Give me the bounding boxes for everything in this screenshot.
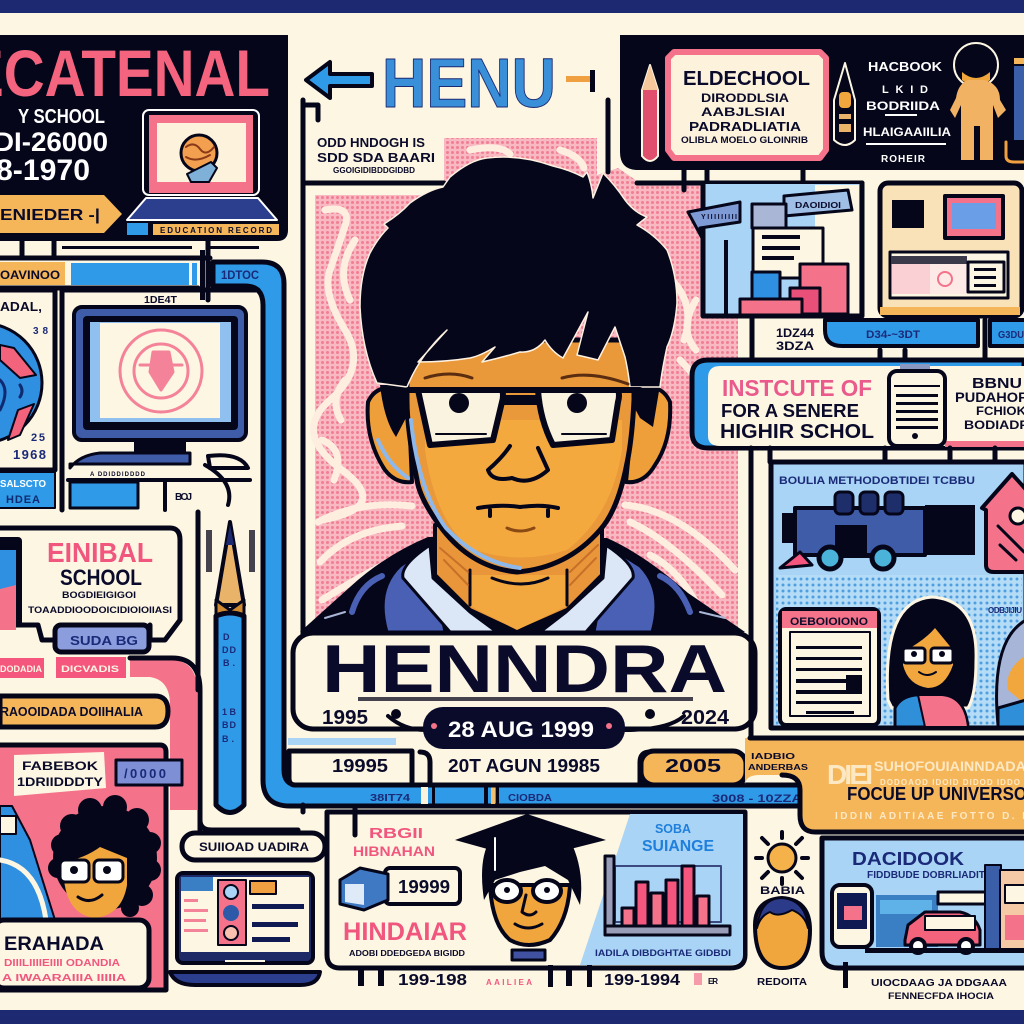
card: eldechool: OLIBLA MOELO GLOINRIB: [681, 135, 809, 145]
panel: monitor: A DDIDDIDDDD: [90, 472, 146, 478]
text: school dates: [0, 106, 108, 187]
footer years: AAILIEA: [486, 978, 532, 987]
panel: pencil column: [198, 512, 298, 830]
text: soba suiange: [642, 821, 714, 855]
text: rbgii: [353, 825, 435, 859]
icon: sun: BABIA: [760, 885, 805, 897]
label: blue box: [0, 472, 55, 508]
footer years: 199-1994: [604, 972, 680, 989]
pink pipe: [130, 660, 197, 810]
panel: right large blue: [751, 448, 1024, 740]
label: 0000: [116, 760, 182, 785]
label: suda bg: SUDA BG: [70, 633, 138, 648]
caption box: DIIILIIIIEIIII ODANDIA: [4, 958, 120, 969]
label: blue box: HDEA: [6, 494, 40, 506]
cell 2005: 2005: [665, 756, 721, 776]
year bars: [752, 318, 1024, 358]
cell 19995: [289, 751, 412, 785]
footer years: 199-198: [398, 972, 467, 989]
document: [752, 204, 823, 278]
fine print: BOGDIEIGIGOI: [62, 590, 136, 600]
text: hindaiar: [343, 918, 467, 958]
portrait caption: GGOIGIDIBDDGIDBD: [333, 166, 415, 175]
footer years: [358, 965, 718, 989]
icon: laptop: [127, 110, 279, 235]
panel: einibal school: [0, 528, 180, 640]
panel: top-left title: [0, 35, 288, 241]
banner right: DAOIDIOI: [795, 201, 841, 210]
label: pink tags: DICVADIS: [61, 664, 119, 674]
icon: phone: [0, 537, 22, 630]
caption box: ERAHADA: [4, 934, 104, 955]
card: eldechool: PADRADLIATIA: [689, 119, 802, 134]
text: bbnu: BODIADF: [964, 418, 1024, 432]
text: school dates: Y SCHOOL: [18, 106, 105, 128]
face: [407, 340, 634, 572]
icon: train: [780, 492, 975, 569]
glasses: [408, 390, 640, 445]
blue connector: 3008 - 10ZZA: [712, 793, 802, 805]
row under monitor: BOJ: [175, 492, 192, 503]
bar chart: [605, 856, 730, 935]
portrait caption: ODD HNDOGH IS: [317, 135, 425, 150]
card: eldechool: DIRODDLSIA: [701, 91, 789, 105]
heading: school: SCHOOL: [60, 565, 142, 590]
orange bar: [0, 696, 168, 727]
eyes: [449, 393, 587, 413]
small text: ODBJIJIU: [988, 606, 1022, 615]
name: HENNDRA: [322, 631, 727, 707]
icon: small head: REDOITA: [757, 977, 807, 988]
heading: institute: FOR A SENERE: [721, 401, 859, 421]
panel: monitor: 1DE4T: [144, 295, 177, 306]
panel: bottom right: [822, 838, 1024, 968]
text: macbook list: HACBOOK: [868, 59, 943, 74]
panel: documents: [688, 183, 862, 316]
icon: towers: [985, 865, 1024, 950]
faint lower: IDDIN ADITIAAE FOTTO D. I: [835, 811, 1024, 822]
character: [48, 795, 161, 918]
icon: large pencil: BD: [222, 720, 236, 730]
caption: chart: IADILA DIBDGHTAE GIDBDI: [595, 948, 731, 958]
icon: pink house: [982, 474, 1024, 572]
blue connector: [213, 262, 825, 806]
card: eldechool: ELDECHOOL: [683, 68, 810, 90]
icon: monitor: [70, 307, 248, 505]
text: macbook list: HLAIGAAIILIA: [863, 125, 951, 139]
orange bar: RAOOIDADA DOIIHALIA: [0, 704, 144, 719]
text: method title: BOULIA METHODOBTIDEI TCBBU: [779, 475, 975, 487]
small tag text: IADBIO: [751, 752, 795, 761]
icon: building: [876, 892, 993, 947]
blue connector: 38IT74: [370, 793, 411, 804]
sideburns: [380, 385, 660, 437]
icon: car: [905, 912, 980, 953]
icon: laptop: EDUCATION RECORD: [160, 226, 272, 235]
portrait caption: SDD SDA BAARI: [317, 150, 435, 165]
ears: [368, 388, 670, 482]
footer text right: FENNECFDA IHOCIA: [888, 991, 995, 1001]
portrait caption: [306, 133, 443, 180]
icon: sun: [756, 832, 808, 897]
document card: [780, 609, 879, 725]
note card: FABEBOK: [22, 759, 98, 773]
neck: [435, 525, 602, 632]
label: blue box: SALSCTO: [0, 479, 46, 490]
text: bbnu: PUDAHOF: [955, 389, 1024, 405]
keyboard and mouse: [70, 453, 248, 505]
note card: 1DRIIDDDTY: [17, 775, 103, 789]
cell 19995: 19995: [332, 756, 388, 776]
text: hindaiar: ADOBI DDEDGEDA BIGIDD: [349, 949, 465, 958]
panel: left globe: 25: [31, 432, 45, 444]
bottom border band: [0, 1010, 1024, 1024]
footer text right: UIOCDAAG JA DDGAAA: [871, 978, 1007, 989]
panel: left globe: 1968: [13, 447, 46, 462]
text: rbgii: HIBNAHAN: [353, 843, 435, 859]
text: bbnu: BBNU: [972, 375, 1022, 392]
faint diei heading: DIEI: [827, 759, 873, 790]
heading: institute: HIGHIR SCHOL: [720, 421, 874, 443]
text: macbook list: BODRIIDA: [866, 99, 940, 113]
seal: [120, 330, 202, 412]
icon: cube with year: [340, 868, 460, 910]
banner left: [688, 202, 740, 238]
cell 2005: [641, 751, 746, 785]
text: bbnu: FCHIOK: [976, 404, 1024, 418]
tag arrow: [0, 195, 122, 233]
faint subline: DODOAOD IDOID DIDOD IDDO: [880, 778, 1020, 787]
label: pink tags: [0, 657, 126, 678]
panel: bottom laptop: [170, 873, 320, 985]
footer text right: [843, 962, 1007, 1001]
banner left: YIIIIIIIII: [701, 214, 737, 221]
text: macbook list: ROHEIR: [881, 154, 926, 165]
pill: sunad uadira: SUIIOAD UADIRA: [199, 840, 309, 854]
label: suda bg: [55, 625, 149, 652]
text: macbook list: [863, 59, 951, 165]
panel: monitor: [62, 250, 258, 510]
text: soba suiange: SOBA: [655, 821, 692, 836]
icon: large pencil: B.: [223, 658, 235, 668]
text: soba suiange: SUIANGE: [642, 838, 714, 855]
heading: dacidook: [852, 849, 985, 881]
panel: left globe: 38: [33, 326, 48, 337]
stack of books: [740, 264, 848, 315]
icon: cube with year: 19999: [398, 877, 450, 897]
icon: globe: [0, 323, 42, 443]
icon: small head: [755, 898, 810, 988]
heading: institute: INSTCUTE OF: [722, 375, 872, 401]
fine print: TOAADDIOODOICIDIOIOIIASI: [28, 605, 172, 615]
date pill: [388, 707, 684, 749]
icon: large pencil: DD: [222, 645, 236, 655]
panel: left globe: ADAL,: [0, 299, 42, 314]
header: henu arrow: HENU: [382, 44, 556, 122]
heading: institute: [720, 375, 874, 443]
vertical connector lines: [150, 625, 355, 835]
panel: left globe: [0, 290, 55, 470]
bar: orange label and blue bar: [0, 262, 197, 285]
icon: large pencil: B.: [222, 734, 234, 744]
icon: second pencil: [834, 63, 855, 145]
cell middle date: [420, 752, 650, 785]
header: henu arrow: [306, 44, 595, 122]
bar: orange label and blue bar: OAVINOO: [0, 268, 60, 282]
girl portrait: [887, 597, 976, 727]
pipe outline: [130, 658, 200, 830]
panel: top-right black band: [620, 35, 1024, 170]
hoodie: [300, 537, 745, 632]
panel: bottom center: [327, 812, 745, 968]
orange panel: university: [745, 738, 1024, 832]
note card: [14, 752, 106, 796]
year left: 1995: [322, 707, 368, 729]
faint header: SUHOFOUIAINNDADA: [874, 758, 1024, 774]
icon: large pencil: D: [223, 632, 230, 642]
dotted area: [776, 575, 1022, 725]
brows: [425, 374, 628, 384]
text: dashed row: [62, 246, 259, 249]
cell middle date: 20T AGUN 19985: [448, 756, 600, 776]
blue arc: [0, 806, 55, 920]
hooded person: [997, 620, 1024, 727]
icon: phone: [832, 885, 872, 947]
card: eldechool: AABJLSIAI: [701, 105, 785, 119]
row under monitor: [68, 480, 250, 510]
icon: pink pencil: [642, 65, 658, 161]
orange panel: university: ANDERBAS: [748, 763, 809, 772]
heading: einibal: EINIBAL: [47, 537, 153, 568]
banner right: [784, 190, 852, 216]
text: macbook list: LKID: [882, 84, 928, 96]
text: bbnu: [955, 375, 1024, 432]
footer years: ER: [708, 977, 718, 986]
caption box: [0, 920, 149, 988]
year bars: D34-~3DT: [866, 329, 920, 341]
portrait: main figure: [300, 157, 745, 632]
panel: pink character: [0, 745, 182, 990]
pill: sunad uadira: [182, 833, 325, 860]
nose and mouth: [478, 446, 558, 531]
blue connector: 1DTOC: [221, 268, 259, 282]
text: hindaiar: HINDAIAR: [343, 918, 467, 946]
years row: [288, 738, 746, 785]
icon: clipboard: [889, 364, 945, 446]
date pill: 28 AUG 1999: [448, 717, 594, 742]
panel: computer desk: [880, 183, 1022, 316]
label: 0000: /0000: [124, 766, 166, 781]
connector lines top: [0, 100, 862, 640]
label: pink tags: DODADIA: [0, 664, 42, 674]
heading: dacidook: DACIDOOK: [852, 849, 964, 869]
year bars: 3DZA: [776, 339, 814, 353]
year right: 2024: [681, 707, 730, 729]
caption box: A IWAARAIIIA IIIIIA: [2, 973, 126, 984]
tag arrow: ENIEDER -|: [0, 207, 100, 224]
card: eldechool: [668, 52, 826, 158]
icon: large pencil: [216, 522, 244, 812]
hair: [360, 157, 677, 387]
icon: standing figure: [950, 43, 1006, 160]
name plate: [293, 631, 755, 729]
icon: blue side object: [1006, 58, 1024, 162]
text: rbgii: RBGII: [369, 825, 423, 842]
graduate: [455, 814, 606, 960]
panel: portrait background: [314, 138, 738, 628]
icon: large pencil: 1B: [222, 707, 236, 717]
blue connector: CIOBDA: [508, 793, 552, 804]
side tiny text: [206, 530, 255, 572]
document card: OEBOIOIONO: [790, 616, 868, 628]
fine print: [28, 590, 172, 615]
heading: dacidook: FIDDBUDE DOBRLIADIT: [867, 870, 985, 881]
year bars: 1DZ44: [776, 326, 814, 340]
panel: institute: [692, 360, 1024, 448]
top border band: [0, 0, 1024, 13]
